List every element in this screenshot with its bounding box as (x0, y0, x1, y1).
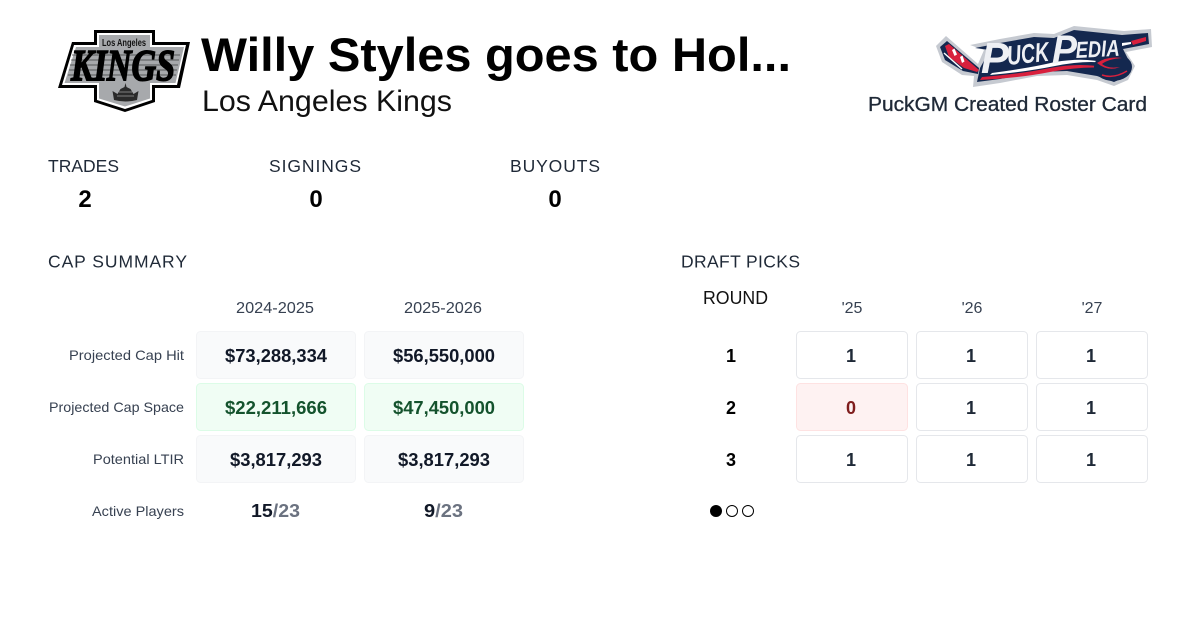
row: potential LTIR: $3,817,293 (230, 450, 322, 470)
row: round 1: 1 (846, 346, 856, 366)
caption: PuckGM Created Roster Card: PuckGM Created Roster Card (868, 94, 1147, 116)
stat: buyouts: 0 (548, 186, 562, 213)
row: round 1: 1 (1086, 346, 1096, 366)
puck (1094, 53, 1132, 81)
column headers: round and years: '25 (842, 300, 863, 317)
title: Willy Styles goes to Hol... (201, 28, 791, 81)
column headers: round and years: '27 (1082, 300, 1103, 317)
stat: signings: SIGNINGS (269, 156, 361, 176)
icon: PuckPedia logo: UCK (1005, 37, 1052, 71)
row: round 3: 3 (726, 450, 736, 470)
icon: Los Angeles Kings logo: Los Angeles (102, 38, 146, 49)
wordmark: P (981, 34, 1010, 83)
row: projected cap space: Projected Cap Space (49, 399, 184, 415)
row: potential LTIR (93, 436, 524, 482)
row: round 3: 1 (1086, 450, 1096, 470)
row: round 2: 1 (966, 398, 976, 418)
row: round 2: 2 (726, 398, 736, 418)
stat: buyouts: BUYOUTS (510, 156, 600, 176)
swoosh (980, 65, 1108, 80)
row: round 2: 1 (1086, 398, 1096, 418)
heading: cap summary: CAP SUMMARY (48, 252, 187, 272)
row: round 1 (726, 332, 1148, 378)
stat: signings: 0 (309, 186, 323, 213)
row: round 1: 1 (726, 346, 736, 366)
pagination dots (710, 505, 754, 517)
column headers: round and years: ROUND (703, 288, 768, 308)
heading: draft picks: DRAFT PICKS (681, 252, 800, 272)
speed lines behind lettering (68, 55, 180, 75)
row: round 2: 0 (846, 398, 856, 418)
row: round 2 (726, 384, 1148, 430)
row: active players (92, 501, 463, 521)
navy banner and stick (975, 30, 1149, 82)
row: active players: 9/23 (424, 501, 463, 521)
row: round 3: 1 (966, 450, 976, 470)
icon: PuckPedia logo (936, 26, 1152, 87)
row: active players: Active Players (92, 503, 184, 519)
panel: draft picks (681, 252, 1148, 517)
row: round 3 (726, 436, 1148, 482)
icon: Los Angeles Kings logo: KINGS (70, 41, 175, 90)
silver outline (936, 26, 1152, 87)
row: projected cap hit: $73,288,334 (225, 346, 327, 366)
stat: buyouts (510, 156, 600, 213)
stat: trades: 2 (78, 186, 92, 213)
row: projected cap space: $22,211,666 (225, 398, 327, 418)
column headers: round and years (703, 288, 1103, 317)
row: round 3: 1 (846, 450, 856, 470)
row: round 1: 1 (966, 346, 976, 366)
column headers: seasons: 2024-2025 (236, 300, 314, 317)
panel: cap summary (48, 252, 524, 521)
row: projected cap hit: $56,550,000 (393, 346, 495, 366)
row: projected cap space (49, 384, 524, 430)
column headers: seasons (236, 300, 482, 317)
subtitle: team name: Los Angeles Kings (202, 85, 452, 118)
icon: PuckPedia logo: EDIA (1075, 35, 1120, 63)
stat: trades: TRADES (48, 156, 119, 176)
row: projected cap hit: Projected Cap Hit (69, 347, 184, 363)
row: projected cap space: $47,450,000 (393, 398, 495, 418)
column headers: seasons: 2025-2026 (404, 300, 482, 317)
icon: Los Angeles Kings logo (58, 30, 190, 112)
row: projected cap hit (69, 332, 524, 378)
icon: PuckPedia logo: P (1052, 28, 1077, 72)
row: active players: 15/23 (251, 501, 300, 521)
stat: signings (269, 156, 361, 213)
row: potential LTIR: Potential LTIR (93, 451, 184, 467)
stat: trades (48, 156, 119, 213)
row: potential LTIR: $3,817,293 (398, 450, 490, 470)
column headers: round and years: '26 (962, 300, 983, 317)
